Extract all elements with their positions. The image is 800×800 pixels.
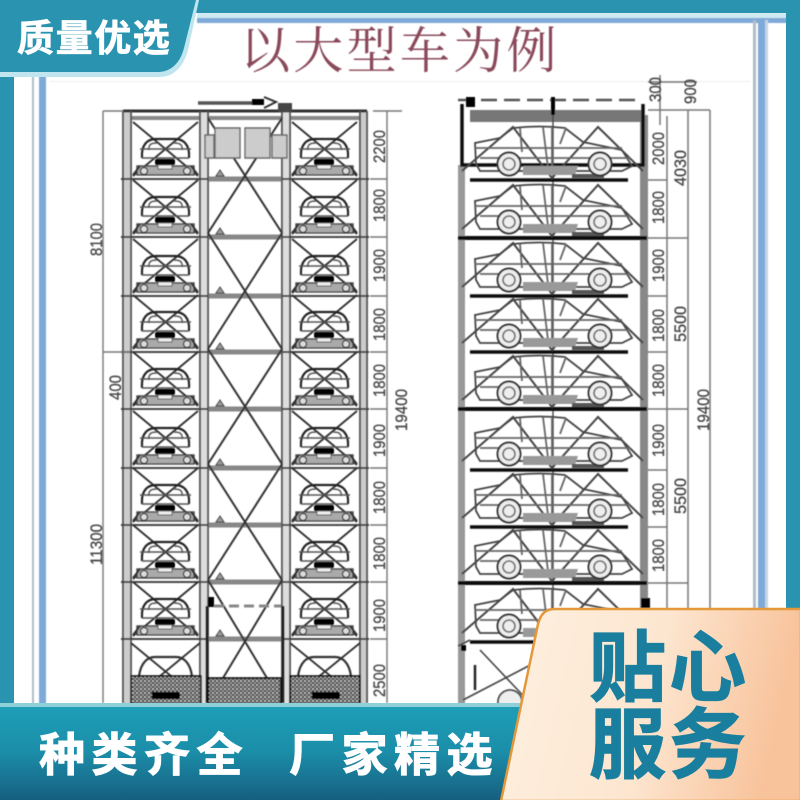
left tower dimensions: 8100	[87, 223, 106, 256]
left tower dimensions: 1800	[370, 189, 389, 222]
bottom banner: 厂家精选	[289, 729, 499, 781]
left tower dimensions: 1800	[370, 308, 389, 341]
left tower dimensions	[87, 111, 411, 703]
panel: thoughtful service: 贴心	[589, 626, 749, 712]
side tower dimensions: 19400	[694, 389, 713, 431]
left tower dimensions: 1900	[370, 424, 389, 457]
left tower dimensions: 1900	[370, 249, 389, 282]
side tower dimensions: 2000	[649, 132, 668, 165]
left drawing: front view tower	[87, 97, 411, 704]
title: 以大型车为例	[240, 23, 560, 79]
side tower dimensions: 1900	[649, 249, 668, 282]
left tower dimensions: 400	[106, 375, 125, 400]
left tower dimensions: 2200	[370, 130, 389, 163]
badge: top-left quality label: 质量优选	[17, 18, 171, 59]
badge: top-left quality label	[0, 0, 199, 77]
side tower dimensions: 4030	[671, 150, 690, 186]
panel: thoughtful service: 服务	[589, 703, 749, 789]
left tower center shaft	[198, 97, 292, 703]
left tower dimensions: 1800	[370, 364, 389, 397]
left tower dimensions: 2500	[370, 664, 389, 697]
ground level mesh and cars	[131, 643, 360, 704]
right stack of cars	[292, 122, 357, 636]
left tower dimensions: 11300	[87, 524, 106, 565]
side tower dimensions: 5500	[671, 478, 690, 514]
side tower dimensions: 1800	[649, 364, 668, 397]
left tower dimensions: 1800	[370, 537, 389, 570]
side tower dimensions: 1800	[649, 539, 668, 572]
left tower dimensions: 1900	[370, 599, 389, 632]
side tower frame	[458, 97, 650, 714]
left tower columns and levels	[121, 111, 369, 704]
panel: thoughtful service	[501, 609, 800, 800]
side tower dimensions: 1800	[649, 483, 668, 516]
side tower dimensions: 1800	[649, 309, 668, 342]
side tower dimensions: 900	[681, 79, 700, 104]
side tower dimensions: 5500	[671, 306, 690, 342]
left stack of cars	[133, 122, 198, 636]
left tower dimensions: 1800	[370, 481, 389, 514]
bottom banner	[0, 703, 800, 800]
side tower dimensions: 300	[646, 77, 665, 102]
side tower dimensions	[646, 75, 713, 800]
side tower dimensions: 1800	[649, 191, 668, 224]
bottom banner: 种类齐全	[39, 729, 249, 781]
left tower dimensions: 19400	[392, 389, 411, 431]
side tower dimensions: 1900	[649, 424, 668, 457]
right drawing: side view tower	[458, 75, 713, 800]
side view cars	[462, 126, 643, 640]
